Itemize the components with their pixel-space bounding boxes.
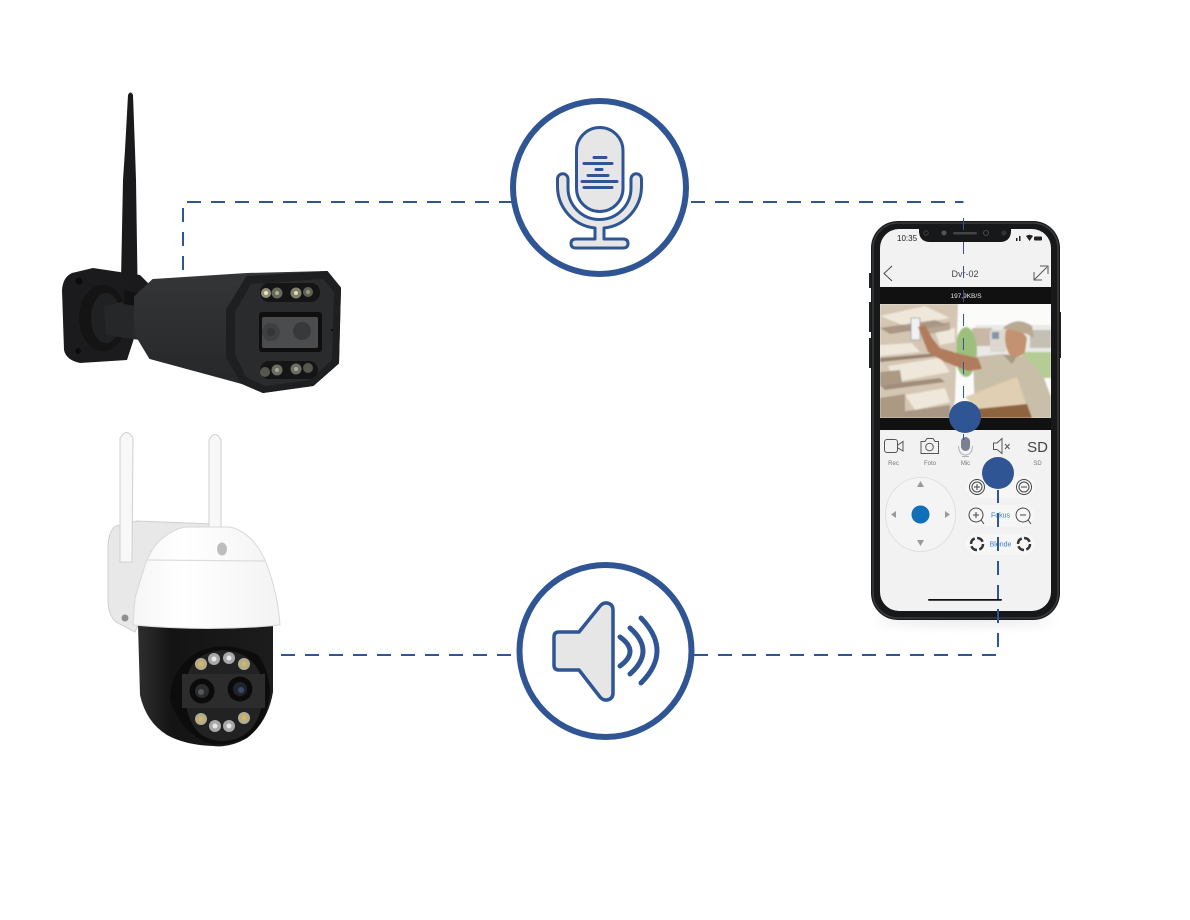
right antenna (209, 434, 221, 530)
control labels: Blende (990, 542, 1012, 548)
left antenna (120, 432, 133, 562)
app lower black band (880, 418, 1051, 430)
icon: speaker (520, 565, 692, 737)
mic icon (958, 437, 972, 457)
LEDs (195, 658, 250, 725)
control labels (990, 512, 1012, 548)
toolbar labels: Rec (888, 461, 899, 467)
joystick (886, 478, 956, 552)
control labels: Fokus (991, 512, 1011, 520)
dome (133, 527, 280, 628)
icon: microphone (513, 101, 686, 274)
mounting plate (62, 268, 149, 363)
video photo (880, 304, 1051, 418)
parcel (965, 377, 1027, 410)
phone (869, 221, 1061, 624)
phone shadow (875, 616, 1055, 624)
connector: dome camera to speaker (281, 654, 517, 656)
antenna (121, 92, 138, 304)
phone: 197,9KB/S (950, 293, 982, 300)
lens window (259, 312, 322, 352)
connector: microphone to phone (691, 201, 964, 203)
doorbell (911, 318, 920, 340)
speed bar (880, 287, 1051, 304)
phone body (871, 221, 1060, 620)
toolbar labels (888, 461, 1042, 467)
focus buttons (969, 508, 1031, 524)
connector: bullet camera to microphone (183, 202, 513, 270)
marker dot: phone speaker (982, 457, 1014, 489)
connector: line into phone app mic (962, 218, 964, 440)
side buttons (869, 273, 1061, 368)
camera face plate (170, 646, 270, 744)
mute speaker icon (994, 438, 1010, 454)
connector: speaker to phone (694, 490, 998, 655)
top LED strip (260, 283, 320, 302)
body (135, 272, 340, 392)
zoom buttons (970, 480, 1032, 494)
control pills (966, 476, 1035, 555)
toolbar labels: Foto (924, 461, 937, 467)
SD label: SD (1027, 439, 1048, 456)
delivery man (973, 354, 1051, 418)
wall bracket (108, 521, 225, 632)
black lower housing (138, 625, 273, 746)
photo icon (921, 438, 938, 454)
record icon (884, 440, 903, 452)
bottom LED strip (260, 361, 318, 379)
toolbar labels: SD (1033, 461, 1042, 467)
marker dot: phone microphone (949, 401, 981, 433)
camera: bullet camera with antenna (62, 92, 340, 392)
camera: PTZ dome camera with two antennas (108, 432, 280, 746)
app header (884, 266, 892, 281)
home indicator (928, 599, 1002, 601)
screen (880, 229, 1051, 611)
arm (104, 298, 140, 340)
toolbar labels: Mic (961, 461, 970, 467)
status bar: 10:35 (897, 234, 918, 243)
diagram canvas (62, 92, 1061, 746)
lenses (190, 678, 214, 704)
iris buttons (971, 538, 1030, 550)
front face (227, 272, 340, 392)
notch (919, 229, 1011, 242)
phone: Dvr-02 (951, 269, 979, 279)
